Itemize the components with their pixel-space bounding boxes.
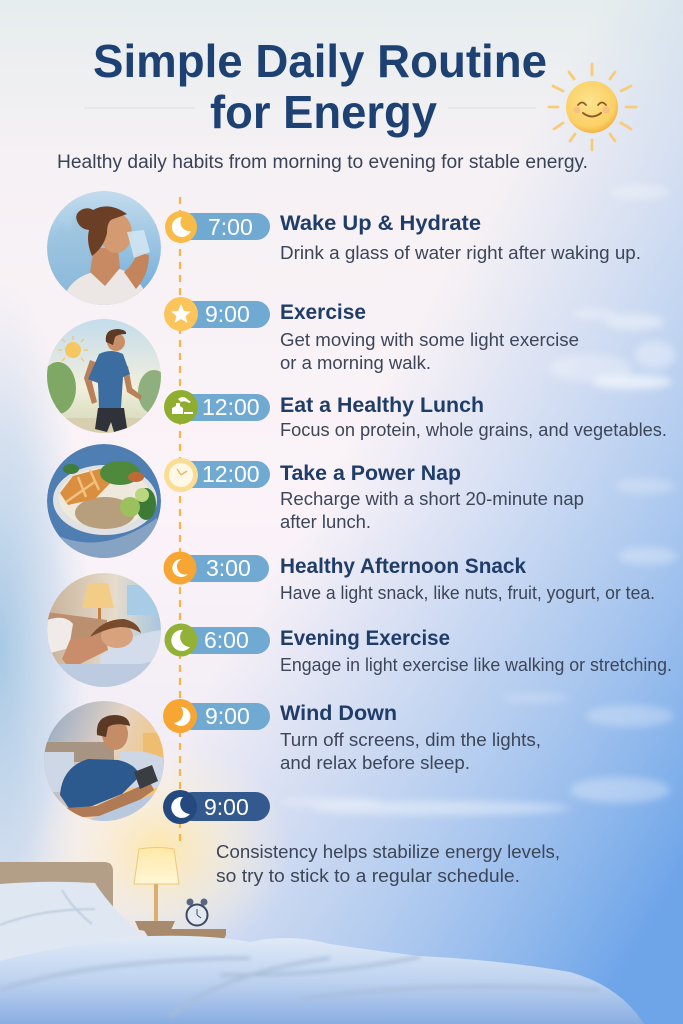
headboard — [0, 862, 113, 909]
step: evening exercise: Evening Exercise — [280, 627, 450, 650]
time marker 9:00 exercise — [164, 297, 270, 331]
time marker 7:00: 7:00 — [208, 214, 253, 240]
step: healthy lunch — [280, 394, 667, 440]
step: power nap: Recharge with a short 20-minute nap — [280, 489, 584, 509]
step: exercise: Exercise — [280, 301, 366, 324]
closing note: Consistency helps stabilize energy levels, — [216, 842, 560, 862]
step: wake up and hydrate — [280, 212, 641, 263]
time marker 12:00 nap — [164, 458, 270, 492]
closing note — [216, 842, 560, 886]
step: healthy lunch: Focus on protein, whole grains, and vegetables. — [280, 420, 667, 440]
photo: healthy lunch plate — [47, 444, 161, 558]
title — [93, 35, 547, 138]
photo: woman drinking water — [47, 191, 161, 305]
time marker 9:00 sleep: 9:00 — [204, 794, 249, 820]
step: healthy lunch: Eat a Healthy Lunch — [280, 394, 484, 417]
step: evening exercise: Engage in light exercise like walking or stretching. — [280, 655, 672, 675]
step: afternoon snack — [280, 555, 655, 603]
step: wake up and hydrate: Wake Up & Hydrate — [280, 212, 481, 235]
title flanking rules — [84, 107, 536, 109]
step: power nap — [280, 462, 584, 532]
time marker 6:00: 6:00 — [204, 627, 249, 653]
photo: man jogging — [47, 319, 161, 433]
photo: woman napping — [47, 573, 161, 690]
time marker 9:00 wind down — [163, 699, 270, 733]
subtitle: Healthy daily habits from morning to evening for stable energy. — [57, 152, 588, 173]
closing note: so try to stick to a regular schedule. — [216, 866, 520, 886]
step: exercise: Get moving with some light exercise — [280, 330, 579, 350]
clouds — [280, 185, 678, 815]
step: wind down — [280, 702, 541, 773]
step: wind down: Turn off screens, dim the lights, — [280, 730, 541, 750]
step: exercise: or a morning walk. — [280, 353, 431, 373]
pillow — [0, 882, 138, 952]
time marker 6:00 — [164, 624, 270, 656]
icon: smiling sun — [549, 64, 636, 150]
time marker 9:00 exercise: 9:00 — [205, 301, 250, 327]
timeline dashed line — [179, 197, 181, 846]
time marker 12:00 lunch — [164, 390, 270, 424]
step: power nap: Take a Power Nap — [280, 462, 461, 485]
step: afternoon snack: Have a light snack, like nuts, fruit, yogurt, or tea. — [280, 583, 655, 603]
time marker 12:00 nap: 12:00 — [202, 461, 260, 487]
step: exercise — [280, 301, 579, 373]
step: evening exercise — [280, 627, 672, 675]
time marker 9:00 wind down: 9:00 — [205, 703, 250, 729]
title: for Energy — [210, 86, 437, 138]
illustration: bed with lamp and clock — [0, 848, 644, 1024]
step: power nap: after lunch. — [280, 512, 371, 532]
step: wind down: and relax before sleep. — [280, 753, 470, 773]
time marker 7:00 — [165, 211, 270, 243]
time marker 3:00 — [164, 552, 269, 584]
time marker 3:00: 3:00 — [206, 555, 251, 581]
nightstand — [144, 929, 226, 938]
alarm clock — [186, 898, 208, 926]
step: wake up and hydrate: Drink a glass of water right after waking up. — [280, 243, 641, 263]
step: wind down: Wind Down — [280, 702, 397, 725]
time marker 9:00 sleep — [163, 790, 270, 824]
title: Simple Daily Routine — [93, 35, 547, 87]
lamp — [134, 848, 179, 932]
time marker 12:00 lunch: 12:00 — [202, 394, 260, 420]
photo: man reading in bed — [44, 701, 166, 822]
step: afternoon snack: Healthy Afternoon Snack — [280, 555, 526, 578]
duvet — [0, 936, 644, 1024]
